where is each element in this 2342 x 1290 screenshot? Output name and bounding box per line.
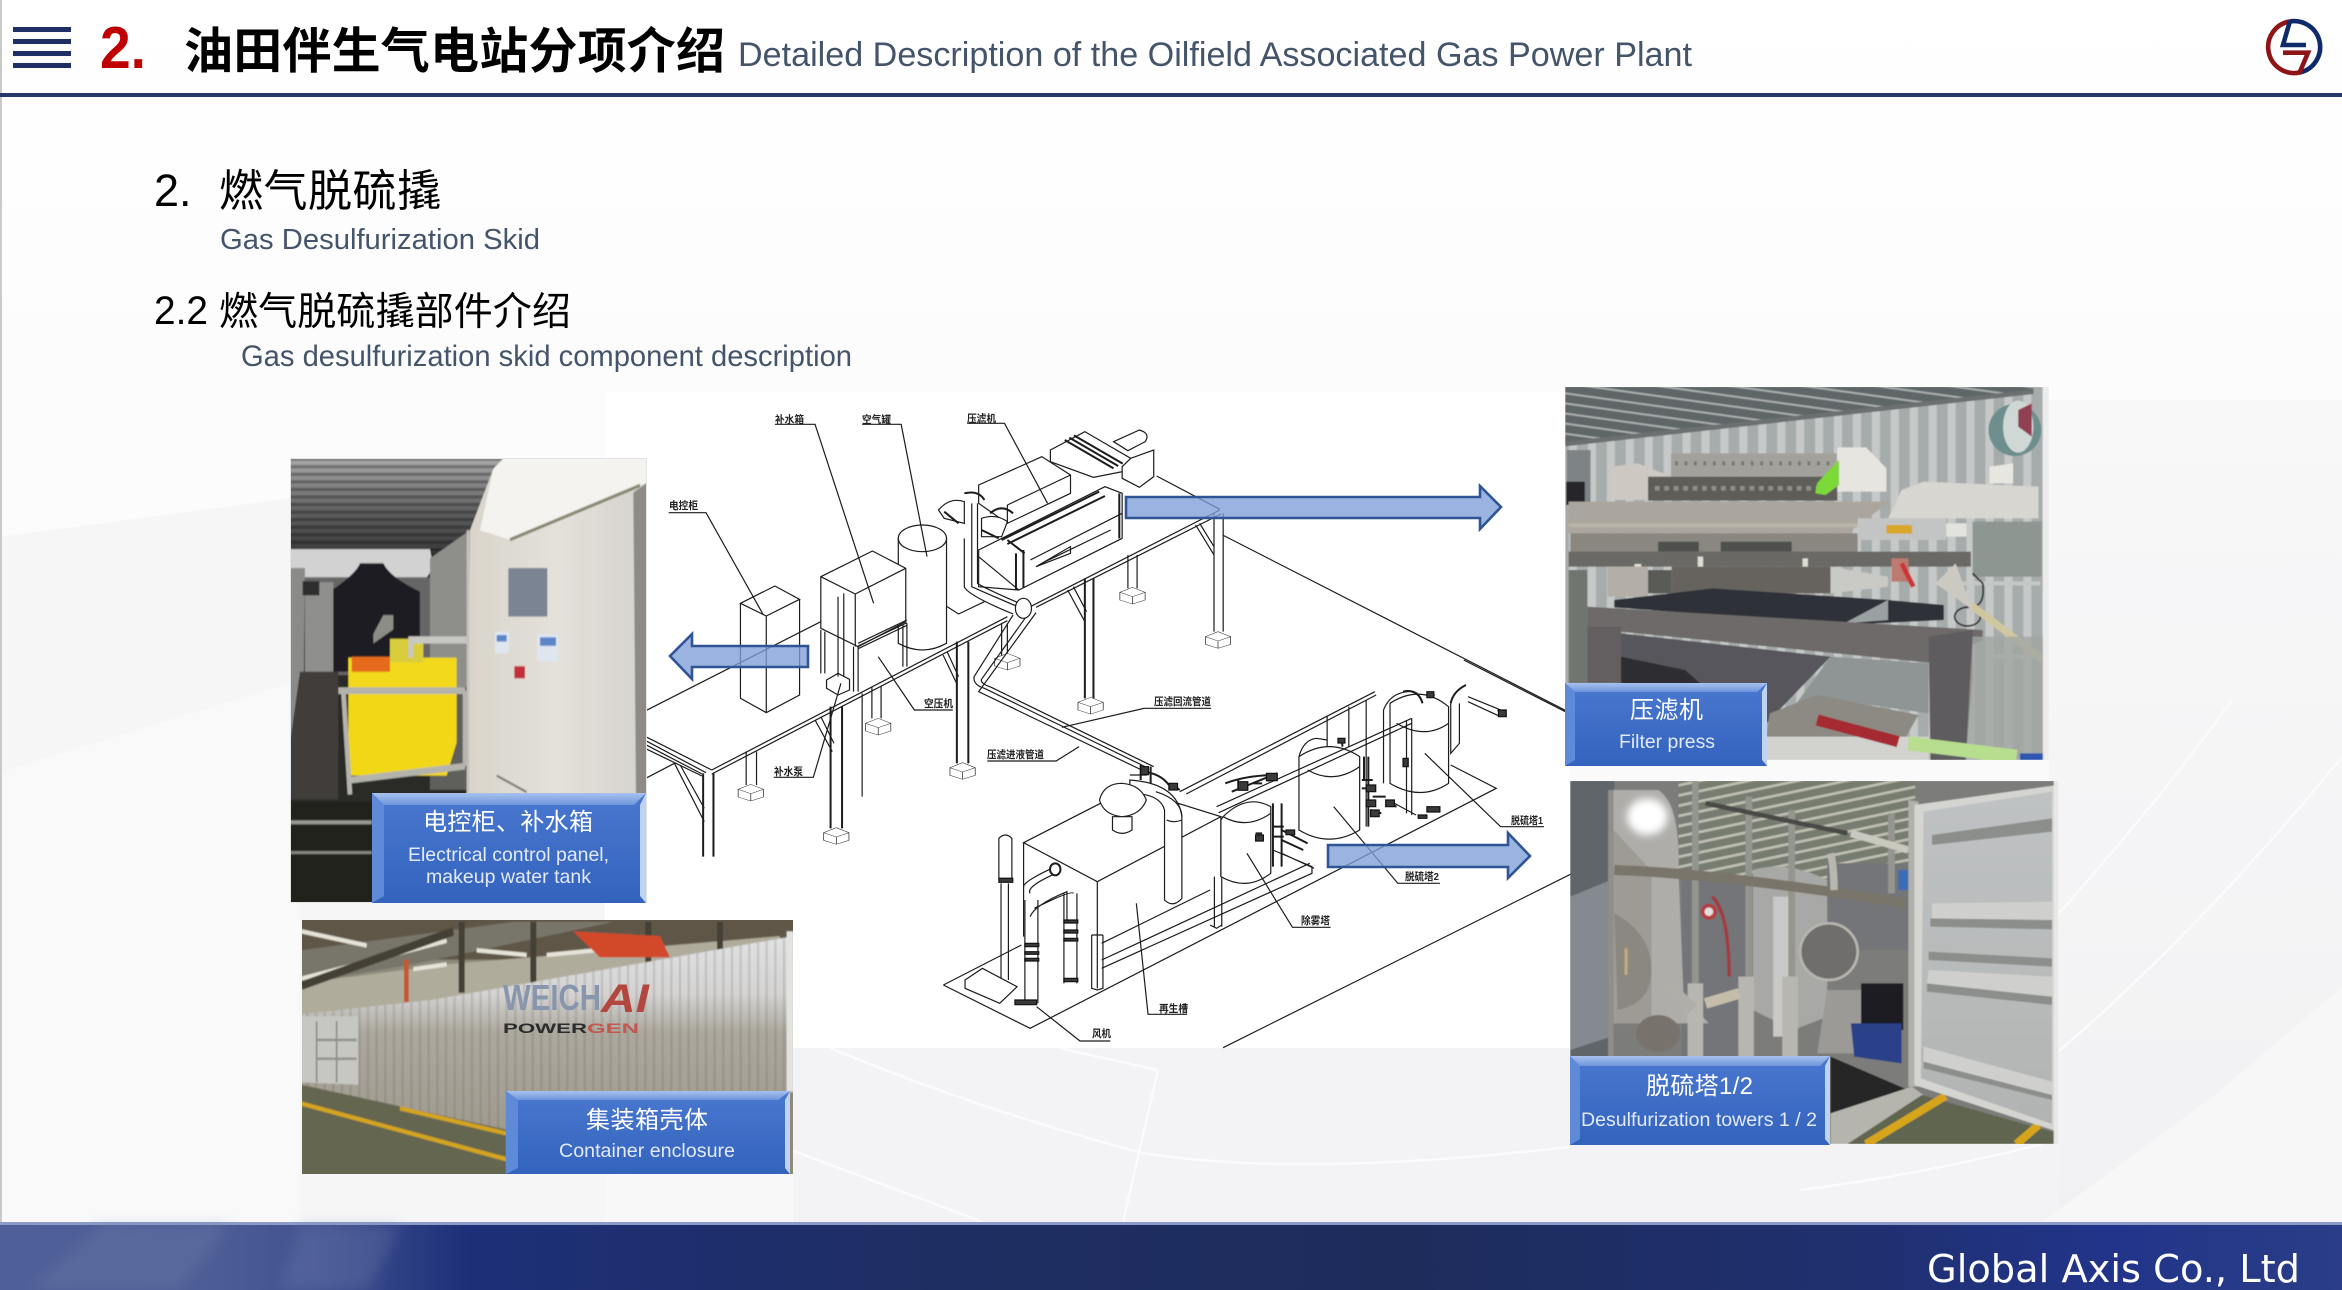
photo: electrical control panel and makeup water tank: [290, 458, 647, 903]
label: desulfurization towers: 脱硫塔1/2: [1646, 1073, 1753, 1100]
header bar: [0, 15, 2342, 97]
header rule: [0, 93, 2342, 97]
photo signage text: POWER: [503, 1020, 587, 1036]
desulfurization tower 1: [1390, 694, 1449, 792]
subsection heading: [154, 289, 852, 373]
photo: container enclosure: [300, 917, 797, 1177]
electrical cabinet: [740, 586, 800, 616]
label: electrical control panel, makeup water tank: Electrical control panel,: [408, 844, 609, 866]
section heading: Gas Desulfurization Skid: [220, 224, 540, 256]
water tank and compressor frame: [821, 551, 906, 647]
cyclone head and main pipe: [1130, 780, 1182, 904]
subsection heading: 燃气脱硫撬部件介绍: [219, 291, 571, 334]
section heading: [154, 165, 540, 256]
filter press return and feed pipes: [974, 613, 1154, 772]
valve clusters: [1141, 692, 1506, 841]
diagram callout labels: 空气罐: [862, 413, 891, 426]
label: desulfurization towers: [1570, 1056, 1830, 1145]
arrow: to electrical cabinet photo: [670, 634, 808, 679]
diagram callout labels: 压滤机: [967, 412, 996, 425]
footer band: [0, 1222, 2342, 1290]
label: electrical control panel, makeup water tank: [372, 793, 646, 903]
diagram white backing panel: [605, 392, 1570, 1048]
callout leader lines, upper: [669, 423, 1211, 777]
diagram callout labels: [669, 412, 1543, 1040]
diagram callout labels: 空压机: [924, 697, 953, 710]
icon: menu: [13, 27, 71, 68]
photo signage text: WEICH: [503, 977, 601, 1018]
label: container enclosure: Container enclosure: [559, 1140, 735, 1162]
label: electrical control panel, makeup water tank: 电控柜、补水箱: [423, 809, 593, 836]
photo: filter press: [1565, 387, 2049, 760]
regeneration tank: [1024, 788, 1221, 882]
section number: 2.: [100, 15, 146, 81]
photo signage text: GEN: [587, 1020, 639, 1036]
label: container enclosure: [506, 1091, 790, 1174]
blower and vertical pipes: [999, 835, 1012, 878]
logo: [2268, 21, 2320, 74]
label: container enclosure: 集装箱壳体: [586, 1107, 708, 1134]
rails behind: [1180, 692, 1376, 827]
diagram callout labels: 风机: [1092, 1027, 1111, 1040]
subsection heading: 2.2: [154, 289, 208, 333]
callout leader lines, lower: [1037, 753, 1544, 1041]
diagram callout labels: 压滤回流管道: [1154, 695, 1211, 708]
diagram callout labels: 补水泵: [774, 765, 803, 778]
diagram callout labels: 脱硫塔2: [1405, 870, 1439, 883]
diagram callout labels: 补水箱: [775, 413, 804, 426]
page title: 油田伴生气电站分项介绍: [184, 25, 725, 79]
label: filter press: [1565, 683, 1767, 766]
page title, English: Detailed Description of the Oilfield Associated Gas Power Plant: [738, 36, 1693, 74]
diagram callout labels: 再生槽: [1159, 1002, 1188, 1015]
label: filter press: Filter press: [1619, 731, 1715, 753]
isometric system diagram: lower desulfurization skid: [943, 660, 1611, 1048]
air tank cylinder: [898, 538, 947, 650]
arrow: to desulfurization tower photo: [1328, 833, 1530, 878]
label: filter press: 压滤机: [1630, 697, 1703, 724]
filter press: [979, 487, 1122, 590]
subsection heading: Gas desulfurization skid component description: [241, 340, 852, 373]
label: electrical control panel, makeup water tank: makeup water tank: [426, 866, 591, 888]
diagram callout labels: 压滤进液管道: [987, 748, 1044, 761]
diagram callout labels: 脱硫塔1: [1511, 814, 1543, 827]
diagram callout labels: 除雾塔: [1301, 914, 1330, 927]
photo: desulfurization towers: [1570, 781, 2058, 1144]
isometric system diagram: upper platform: [646, 423, 1570, 857]
arrow: to filter press photo: [1126, 486, 1501, 529]
photo signage text: [503, 984, 650, 1033]
demister tower: [1221, 802, 1271, 883]
desulfurization tower 2: [1299, 747, 1360, 839]
company name: Global Axis Co., Ltd: [1927, 1247, 2300, 1290]
photo signage text: AI: [600, 977, 650, 1021]
section heading: 燃气脱硫撬: [219, 167, 441, 216]
diagram callout labels: 电控柜: [669, 499, 698, 512]
section heading: 2.: [154, 165, 192, 216]
label: desulfurization towers: Desulfurization towers 1 / 2: [1581, 1109, 1817, 1131]
